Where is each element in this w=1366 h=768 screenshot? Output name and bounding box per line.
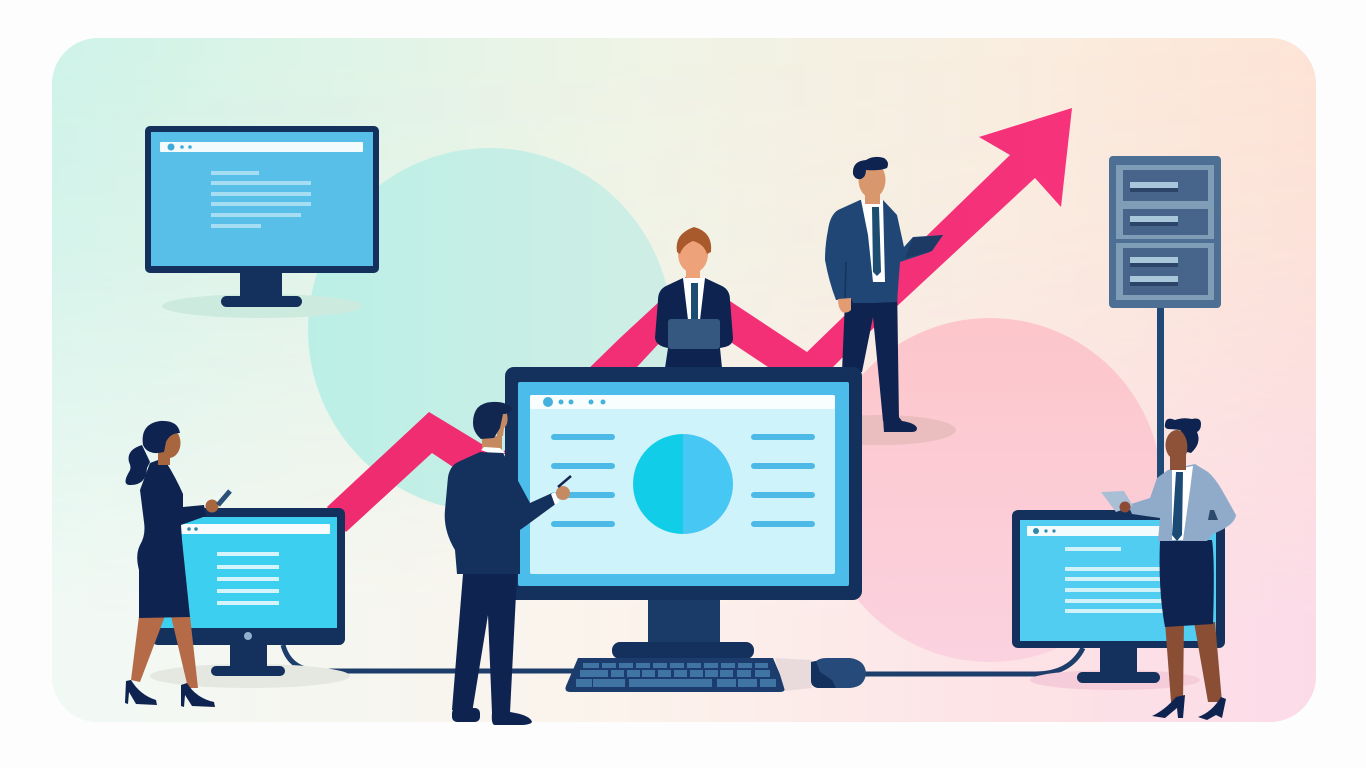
keyboard (566, 658, 785, 692)
left monitor (150, 508, 350, 688)
mouse (775, 658, 866, 691)
woman with tablet (1101, 418, 1236, 720)
central monitor (505, 367, 862, 659)
woman with phone (125, 421, 230, 707)
server rack (1109, 156, 1221, 490)
rising red arrow (327, 108, 1072, 532)
screen list lines (551, 434, 815, 527)
right monitor (1012, 510, 1225, 690)
pink background circle (818, 318, 1162, 662)
man standing with tablet (804, 157, 956, 445)
man pointing at monitor (445, 402, 571, 725)
cables (283, 645, 1083, 674)
teal background circle (308, 148, 672, 512)
pie chart (633, 434, 733, 534)
top left monitor (145, 126, 379, 318)
man seated with laptop (655, 227, 733, 368)
